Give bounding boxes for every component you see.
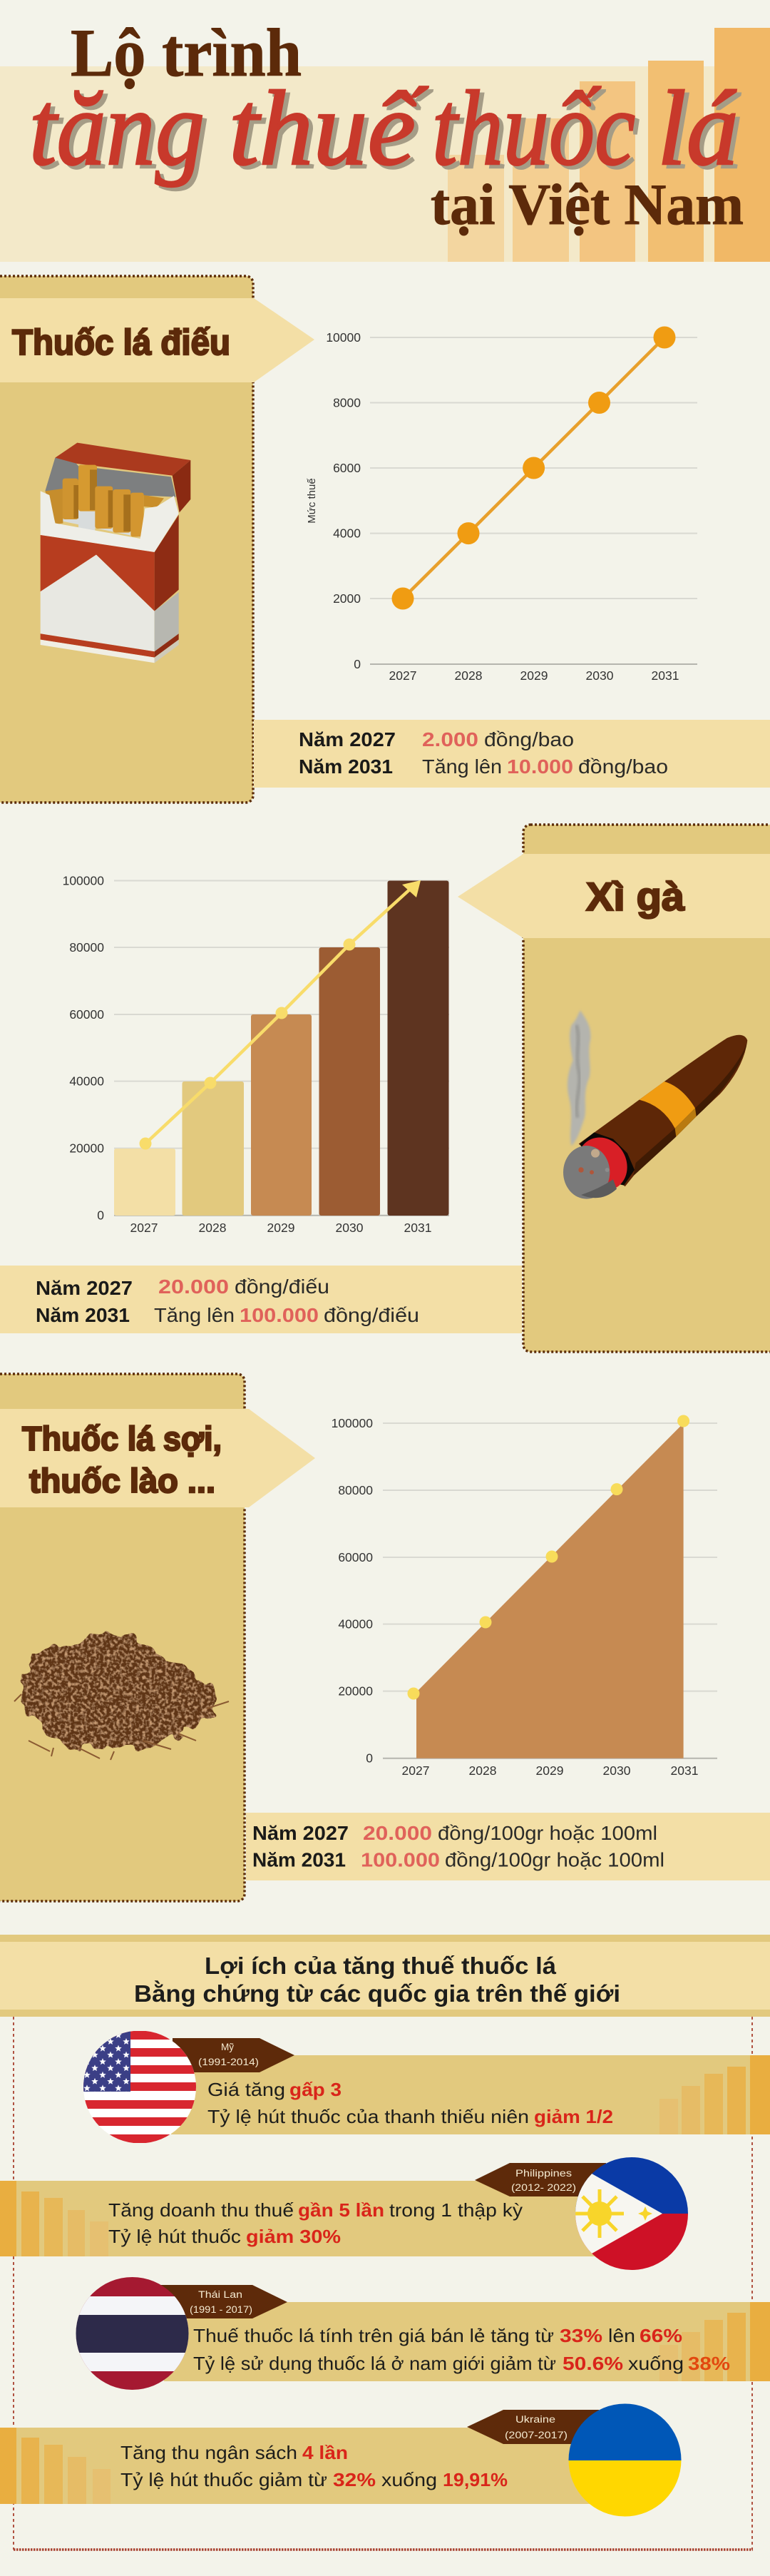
section heading: benefits of tax increase: [0, 1935, 770, 2017]
case: Thailand: 66%: [640, 2325, 682, 2346]
panel: rolling tobacco: [0, 1374, 315, 1901]
case: United States: gấp 3: [289, 2079, 342, 2100]
line chart: cigarettes: 10000: [326, 330, 361, 345]
area chart: rolling tobacco: 80000: [338, 1483, 373, 1497]
title: tại Việt Nam: [431, 172, 744, 237]
info box: cigarettes: đồng/bao: [578, 755, 668, 778]
line chart: cigarettes: 6000: [333, 461, 361, 475]
case: United States: giảm 1/2: [534, 2106, 613, 2127]
case: Ukraine: 19,91%: [443, 2469, 508, 2490]
icon: US flag: [83, 2031, 196, 2143]
tag: Philippines: [475, 2163, 606, 2196]
title: thuế: [233, 73, 433, 191]
bar chart: cigars: 2028: [199, 1221, 226, 1235]
line chart: cigarettes: 2027: [389, 668, 416, 683]
area chart: rolling tobacco: 100000: [332, 1416, 373, 1430]
info box: cigars: 20.000: [158, 1276, 229, 1298]
area chart: rolling tobacco: 40000: [338, 1617, 373, 1631]
title: thuế: [229, 69, 428, 188]
arrow label: Thuốc lá điếu: [0, 298, 314, 382]
title: lá: [657, 69, 739, 188]
case: Thailand: [76, 2277, 770, 2390]
dotted frame: international evidence: [14, 2017, 753, 2550]
line chart: cigarettes: 2030: [586, 668, 614, 683]
case: Thailand: Tỷ lệ sử dụng thuốc lá ở nam giới giảm từ: [193, 2353, 556, 2374]
area chart: rolling tobacco: 2030: [603, 1763, 631, 1778]
case: Thailand: lên: [608, 2325, 635, 2346]
case: United States: Tỷ lệ hút thuốc của thanh thiếu niên: [207, 2106, 529, 2127]
case: Philippines: Tỷ lệ hút thuốc: [108, 2226, 241, 2247]
area chart: rolling tobacco: 2027: [402, 1763, 429, 1778]
tag: Mỹ: (1991-2014): [198, 2057, 259, 2067]
tag: Ukraine: Ukraine: [515, 2414, 555, 2425]
bar chart: cigars: 0: [97, 1208, 104, 1223]
tag: Ukraine: [467, 2410, 599, 2444]
arrow label: Xì gà: [458, 854, 770, 938]
panel: cigars: [458, 825, 770, 1352]
title: Lộ trình: [71, 15, 302, 91]
icon: Thailand flag: [76, 2277, 189, 2390]
bar chart: cigars: 2029: [267, 1221, 294, 1235]
tag: Thái Lan: (1991 - 2017): [190, 2304, 252, 2315]
tag: Thái Lan: [160, 2285, 287, 2318]
line chart: cigarettes: 2000: [333, 591, 361, 606]
area chart: rolling tobacco: 60000: [338, 1550, 373, 1564]
line chart: cigarettes: 2031: [652, 668, 679, 683]
info box: cigars: đồng/điếu: [324, 1304, 419, 1326]
case: Thailand: Thuế thuốc lá tính trên giá bán lẻ tăng từ: [193, 2325, 554, 2346]
case: Philippines: trong 1 thập kỳ: [389, 2199, 523, 2221]
area chart: rolling tobacco: 2029: [536, 1763, 563, 1778]
arrow label: Thuốc lá sợi, thuốc lào: thuốc lào ...: [29, 1462, 215, 1500]
tag: Thái Lan: Thái Lan: [198, 2289, 242, 2300]
info box: rolling tobacco: [246, 1813, 770, 1880]
info box: rolling tobacco: Năm 2027: [252, 1822, 349, 1844]
arrow label: Xì gà: Xì gà: [586, 874, 685, 919]
section heading: benefits of tax increase: Lợi ích của tăng thuế thuốc lá: [205, 1953, 557, 1979]
info box: cigars: Năm 2027: [36, 1277, 133, 1299]
info box: rolling tobacco: 100.000: [361, 1849, 440, 1870]
case: Ukraine: Tỷ lệ hút thuốc giảm từ: [120, 2469, 327, 2490]
tag: Mỹ: Mỹ: [221, 2042, 234, 2052]
line chart: cigarettes: 0: [354, 657, 361, 671]
arrow label: Thuốc lá điếu: Thuốc lá điếu: [12, 322, 230, 362]
arrow label: Thuốc lá sợi, thuốc lào: [0, 1409, 315, 1507]
title: thuốc: [432, 69, 635, 188]
area chart: rolling tobacco: 0: [366, 1751, 373, 1766]
icon: tobacco pile: [14, 1634, 229, 1760]
bar chart: cigars: 2031: [404, 1221, 431, 1235]
tag: Mỹ: [173, 2038, 294, 2072]
case: United States: [83, 2031, 770, 2143]
case: Thailand: 50.6%: [563, 2353, 623, 2374]
info box: cigars: Tăng lên: [154, 1304, 235, 1326]
title: lá: [662, 73, 743, 191]
area chart: rolling tobacco: 2028: [469, 1763, 496, 1778]
case: Ukraine: 4 lần: [302, 2442, 348, 2463]
info box: cigars: [0, 1266, 522, 1333]
section heading: benefits of tax increase: Bằng chứng từ các quốc gia trên thế giới: [134, 1980, 620, 2007]
info box: cigarettes: 10.000: [507, 755, 573, 778]
bar chart: cigars: 100000: [63, 873, 104, 887]
case: Thailand: xuống: [628, 2353, 684, 2374]
icon: cigarette pack: [41, 443, 190, 663]
area chart: rolling tobacco: [332, 1415, 717, 1778]
info box: cigarettes: Năm 2031: [299, 755, 393, 778]
info box: cigarettes: đồng/bao: [484, 728, 574, 750]
case: Ukraine: [0, 2403, 682, 2518]
arrow label: Thuốc lá sợi, thuốc lào: Thuốc lá sợi,: [22, 1420, 222, 1457]
tag: Philippines: Philippines: [515, 2168, 572, 2179]
info box: cigars: Năm 2031: [36, 1304, 130, 1326]
case: Philippines: gần 5 lần: [298, 2199, 384, 2221]
area chart: rolling tobacco: 20000: [338, 1684, 373, 1699]
case: Ukraine: Tăng thu ngân sách: [120, 2442, 297, 2463]
line chart: cigarettes: 8000: [333, 395, 361, 409]
info box: rolling tobacco: đồng/100gr hoặc 100ml: [438, 1822, 657, 1844]
bar chart: cigars: 40000: [69, 1074, 104, 1089]
bar chart: cigars: 20000: [69, 1141, 104, 1156]
info box: rolling tobacco: Năm 2031: [252, 1849, 346, 1870]
icon: Philippines flag: [570, 2157, 688, 2270]
case: Ukraine: xuống: [381, 2469, 437, 2490]
info box: cigarettes: Tăng lên: [422, 755, 502, 778]
case: Philippines: [0, 2157, 688, 2270]
info box: rolling tobacco: đồng/100gr hoặc 100ml: [445, 1849, 664, 1870]
bar chart: cigars: 2027: [130, 1221, 158, 1235]
title: tăng: [29, 69, 205, 188]
case: United States: Giá tăng: [207, 2079, 285, 2100]
line chart: cigarettes: Mức thuế: [306, 478, 318, 524]
title: [29, 15, 744, 237]
bar chart: cigars: 60000: [69, 1007, 104, 1022]
info box: cigarettes: 2.000: [422, 728, 478, 750]
icon: cigar: [563, 1010, 747, 1200]
bar chart: cigars: [63, 873, 449, 1235]
title: tăng: [34, 73, 209, 191]
title: thuốc: [436, 73, 640, 191]
area chart: rolling tobacco: 2031: [671, 1763, 698, 1778]
line chart: cigarettes: 2029: [520, 668, 548, 683]
info box: rolling tobacco: 20.000: [363, 1822, 432, 1844]
trend arrow: [140, 880, 421, 1150]
case: Thailand: 38%: [688, 2353, 730, 2374]
line chart: cigarettes: 4000: [333, 526, 361, 541]
tag: Ukraine: (2007-2017): [505, 2430, 568, 2440]
info box: cigars: 100.000: [240, 1304, 319, 1326]
case: Ukraine: 32%: [333, 2469, 376, 2490]
info box: cigars: đồng/điếu: [235, 1276, 329, 1298]
bar chart: cigars: 2030: [336, 1221, 364, 1235]
bar chart: cigars: 80000: [69, 940, 104, 954]
line chart: cigarettes: 2028: [455, 668, 482, 683]
panel: cigarettes: [0, 276, 314, 803]
icon: Ukraine flag: [568, 2403, 682, 2518]
case: Thailand: 33%: [560, 2325, 602, 2346]
tag: Philippines: (2012- 2022): [511, 2182, 576, 2193]
line chart: cigarettes: [306, 327, 697, 683]
case: Philippines: Tăng doanh thu thuế: [108, 2199, 294, 2221]
case: Philippines: giảm 30%: [246, 2226, 341, 2247]
info box: cigarettes: Năm 2027: [299, 728, 396, 750]
header banner: [0, 28, 770, 262]
info box: cigarettes: [254, 720, 770, 788]
